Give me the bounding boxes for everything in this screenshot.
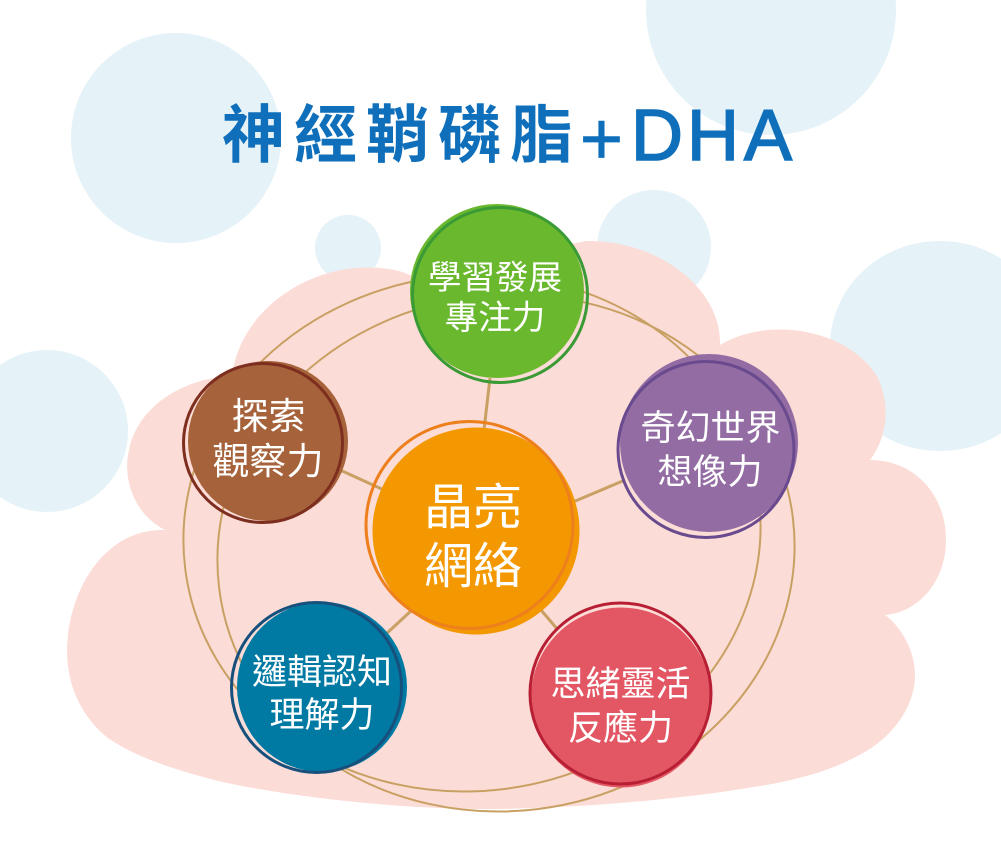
node: 專注力: [410, 204, 588, 382]
node: 想像力: 想像力: [657, 453, 763, 492]
node: 觀察力: 觀察力: [212, 441, 324, 482]
node: 理解力: 邏輯認知: [252, 653, 392, 692]
node: 觀察力: [184, 361, 348, 522]
outer connecting rings: [154, 242, 824, 841]
node: 反應力: [530, 603, 711, 788]
node: 理解力: 理解力: [269, 696, 375, 735]
node: 觀察力: 探索: [232, 396, 306, 437]
node: 理解力: [232, 602, 407, 772]
node: 專注力: 學習發展: [428, 260, 562, 297]
center node: 晶亮網絡: [366, 422, 580, 634]
title: +: [580, 97, 623, 180]
background bubbles: [0, 0, 1001, 512]
center node: 晶亮網絡: 網絡: [424, 540, 522, 594]
node: 想像力: 奇幻世界: [640, 409, 781, 448]
node: 反應力: 思緒靈活: [550, 665, 691, 704]
center node: 晶亮網絡: 晶亮: [424, 481, 522, 535]
node: 反應力: 反應力: [568, 709, 673, 748]
spokes from center to nodes: [340, 378, 625, 634]
title: DHA: [631, 96, 792, 176]
title: 神經鞘磷脂: [222, 101, 582, 171]
node: 專注力: 專注力: [445, 300, 545, 337]
title: [222, 96, 792, 180]
node: 想像力: [618, 354, 798, 538]
pink cloud backdrop: [67, 241, 946, 809]
